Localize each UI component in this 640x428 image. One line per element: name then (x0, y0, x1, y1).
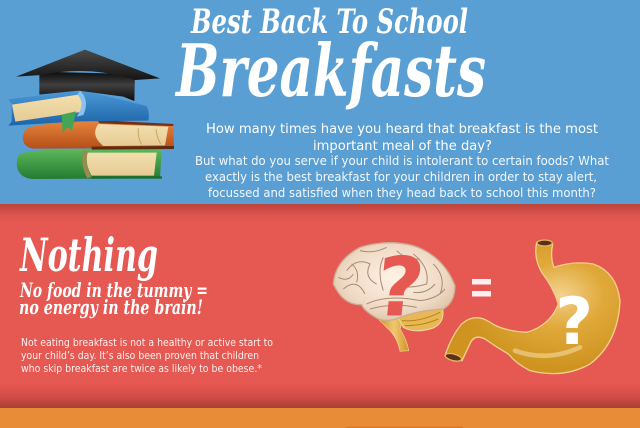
lower opening (444, 352, 462, 363)
intro text block: But what do you serve if your child is intolerant to certain foods? What (195, 153, 609, 168)
equals sign (472, 279, 491, 296)
white question mark: ? (555, 285, 593, 360)
icon: brain with question mark (333, 241, 455, 351)
title line: Best Back To School: Best Back To School (190, 2, 468, 42)
intro text block: important meal of the day? (313, 138, 492, 154)
esophagus opening (537, 240, 552, 246)
icon: graduation cap on stack of books (8, 50, 174, 179)
subheading: No food in the tummy: no energy in the brain! (19, 295, 203, 319)
icon: blue book (8, 90, 149, 126)
heading: Nothing: Nothing (19, 228, 158, 282)
intro text block: exactly is the best breakfast for your children in order to stay alert, (205, 169, 597, 184)
panel: orange section background (0, 408, 640, 428)
panel: blue header background (0, 0, 640, 204)
icon: graduation cap (16, 50, 160, 101)
brain folds (338, 247, 445, 309)
body text: not eating breakfast: Not eating breakfast is not a healthy or active start to (21, 337, 273, 349)
icon: green bookmark (62, 111, 76, 133)
title line: Breakfasts: Breakfasts (175, 28, 486, 113)
body text: not eating breakfast: your child’s day. It’s also been proven that children (21, 350, 259, 362)
subheading: No food in the tummy: No food in the tummy = (19, 278, 208, 302)
intro text block: focussed and satisfied when they head back to school this month? (208, 185, 596, 200)
icon: green book (17, 149, 162, 179)
body text: not eating breakfast (21, 337, 273, 375)
stomach highlight (515, 347, 580, 356)
intro text block (195, 121, 609, 200)
intro text block: How many times have you heard that breakfast is the most (206, 121, 598, 137)
cerebellum (398, 308, 443, 331)
body text: not eating breakfast: who skip breakfast are twice as likely to be obese.* (21, 363, 262, 375)
heading stub in orange section (346, 426, 463, 428)
panel: red section background (0, 204, 640, 408)
icon: stomach with question mark (444, 240, 620, 374)
red question mark: ? (371, 241, 429, 336)
stomach body (445, 242, 620, 374)
subheading: No food in the tummy (19, 278, 208, 319)
icon: orange book (23, 120, 174, 150)
brain stem (379, 318, 409, 351)
cerebrum (333, 243, 455, 320)
